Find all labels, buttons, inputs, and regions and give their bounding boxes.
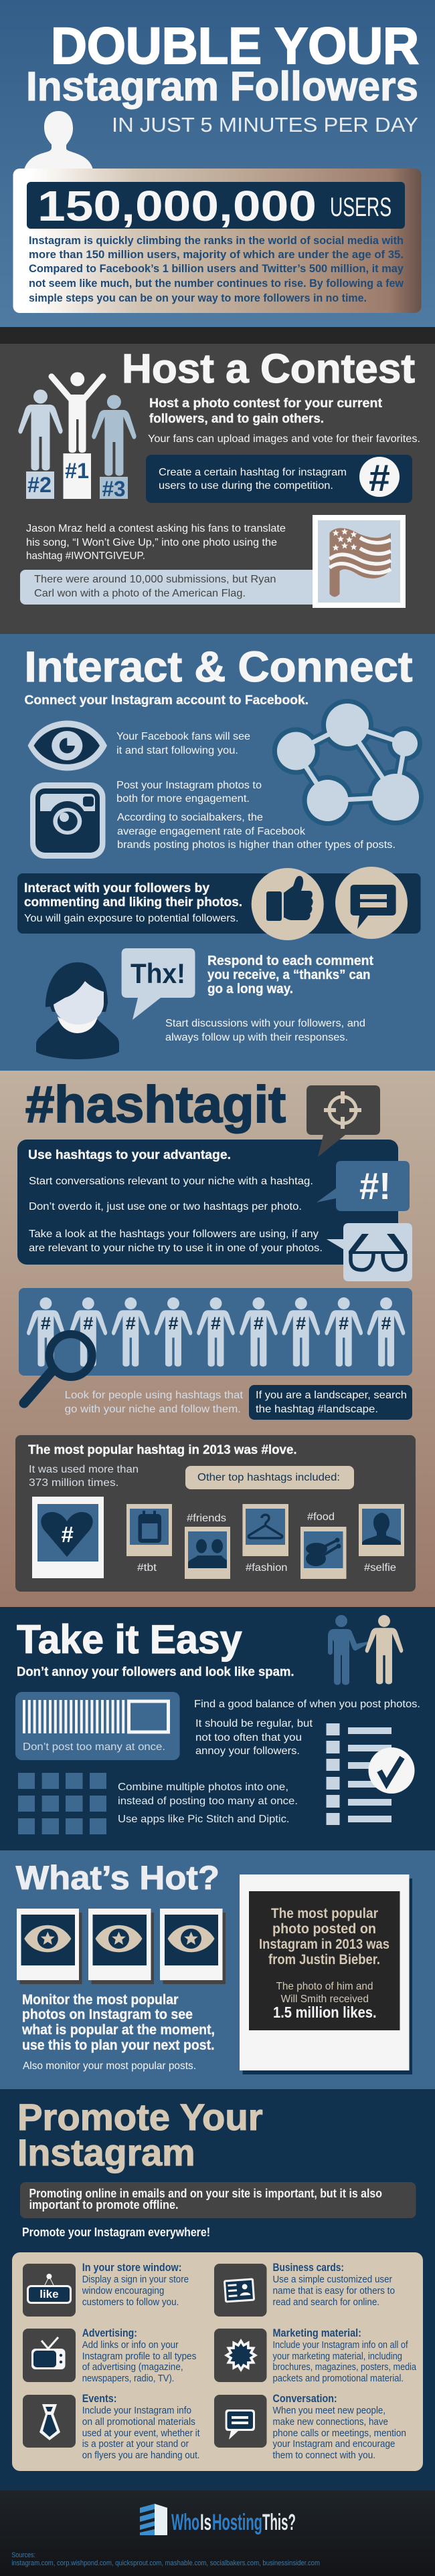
text: contest intro (148, 397, 420, 445)
polaroid: justin bieber: photo posted on (272, 1921, 376, 1937)
polaroid: eye two (88, 1909, 154, 1984)
panel: don't post too many (15, 1692, 180, 1760)
callout: other top hashtags: Other top hashtags included: (197, 1472, 340, 1483)
text: conversation: them to connect with you. (273, 2450, 375, 2461)
text: combine photos: Combine multiple photos into one, (118, 1782, 288, 1793)
subheading: connect account: Connect your Instagram account to Facebook. (24, 693, 309, 708)
icon: burst badge (214, 2329, 266, 2382)
speech bubble: glasses (327, 1223, 412, 1281)
subheading: don't annoy: Don’t annoy your followers and look like spam. (17, 1665, 294, 1679)
panel: don't post too many: Don’t post too many at once. (23, 1741, 165, 1753)
logo: whoishostingthis (140, 2504, 296, 2535)
icon: magnifying glass (24, 1334, 92, 1403)
title: DOUBLE YOUR (51, 17, 419, 75)
hashtag labels: #fashion (246, 1562, 288, 1574)
text: marketing material: your marketing material, including (273, 2351, 402, 2362)
heading: promote your instagram: Instagram (17, 2131, 195, 2173)
speech bubble: thx: Thx! (130, 958, 185, 989)
hashtag labels: #friends (187, 1513, 226, 1524)
speech bubble: hash exclamation (317, 1161, 410, 1211)
text: conversation (273, 2392, 406, 2461)
text: monitor your posts: Also monitor your most popular posts. (23, 2060, 196, 2072)
heading: take it easy: Take it Easy (17, 1617, 242, 1662)
text: sources: Sources: (11, 2551, 35, 2559)
panel: interact with followers (17, 867, 420, 940)
intro text: simple steps you can be on your way to more followers in no time. (29, 292, 367, 304)
text: events: is a poster at your stand or (82, 2439, 189, 2450)
text: contest intro: Host a photo contest for your current (149, 397, 383, 411)
text: respond to comments: go a long way. (207, 982, 293, 996)
stat banner: USERS (330, 193, 392, 222)
title (26, 17, 419, 136)
panel: hashtag people: # (296, 1313, 306, 1333)
text: events (82, 2392, 199, 2461)
panel: use hashtags: Take a look at the hashtags your followers are using, if any (29, 1228, 319, 1240)
panel: hashtag people: # (211, 1313, 221, 1333)
text: business cards: Use a simple customized user (273, 2274, 392, 2285)
text: post photos: both for more engagement. (116, 793, 250, 804)
title: Instagram Followers (26, 64, 418, 109)
heading: promote your instagram (17, 2096, 263, 2173)
panel: hashtag people: # (83, 1313, 93, 1333)
heading: what's hot: What’s Hot? (16, 1859, 220, 1897)
text: advertising: Advertising: (82, 2327, 137, 2339)
panel: hashtag people: # (254, 1313, 264, 1333)
panel: promotion tips (12, 2252, 423, 2471)
text: jason mraz: his song, “I Won’t Give Up,” into one photo using the (26, 537, 277, 548)
panel: use hashtags: Start conversations relevant to your niche with a hashtag. (29, 1176, 313, 1187)
text: events: on all promotional materials (82, 2417, 195, 2428)
polaroid: justin bieber: The most popular (271, 1906, 378, 1921)
text: business cards: Business cards: (273, 2261, 344, 2274)
text: post photos: Post your Instagram photos to (116, 780, 262, 791)
text: advertising: Instagram profile to all types (82, 2351, 197, 2362)
stat banner: 150,000,000 (37, 182, 317, 230)
intro text: Instagram is quickly climbing the ranks in the world of social media with (29, 234, 404, 247)
text: look for people: go with your niche and follow them. (65, 1404, 241, 1415)
text: store window (82, 2261, 189, 2308)
polaroid: love heart (32, 1497, 104, 1578)
text: balance (194, 1699, 420, 1757)
text: events: on flyers you are handing out. (82, 2450, 199, 2461)
text: marketing material (273, 2327, 417, 2384)
text: jason mraz: hashtag #IWONTGIVEUP. (26, 550, 145, 562)
icon: user silhouette (24, 111, 93, 170)
text: respond to comments: Respond to each comment (207, 954, 373, 968)
callout: submissions (20, 570, 318, 605)
text: combine photos (118, 1782, 298, 1825)
text: respond to comments: you receive, a “thanks” can (207, 968, 371, 982)
icon: conversation bubble (214, 2395, 266, 2448)
text: look for people: Look for people using hashtags that (65, 1390, 244, 1401)
polaroid: justin bieber: Instagram in 2013 was (259, 1937, 389, 1952)
section background: footer (0, 2490, 435, 2576)
text: facebook fans: it and start following you. (116, 745, 238, 756)
callout: landscaper: the hashtag #landscape. (256, 1404, 378, 1415)
intro text (29, 234, 404, 304)
callout: promote offline (20, 2182, 416, 2218)
text: business cards (273, 2261, 395, 2308)
icon: thumbs up (252, 868, 324, 940)
polaroid: love heart: # (62, 1522, 74, 1547)
section background: promote (0, 2089, 435, 2490)
text: monitor popular photos: what is popular at the moment, (21, 2022, 215, 2038)
hashtag labels: #selfie (364, 1562, 396, 1574)
polaroid: friends (185, 1527, 230, 1579)
text: start discussions: always follow up with their responses. (165, 1032, 348, 1043)
panel: most popular hashtag (15, 1435, 416, 1592)
text: events: used at your event, whether it (82, 2428, 199, 2439)
panel: use hashtags (17, 1140, 398, 1265)
title: IN JUST 5 MINUTES PER DAY (112, 113, 418, 136)
icon: comment bubble (335, 867, 408, 939)
intro text: Compared to Facebook’s 1 billion users and Twitter’s 500 million, it may (29, 262, 404, 275)
text: monitor popular photos: use this to plan your next post. (22, 2038, 214, 2053)
section background: what's hot (0, 1850, 435, 2089)
polaroid: justin bieber: from Justin Bieber. (268, 1952, 380, 1967)
text: conversation: phone calls or meetings, mention (273, 2428, 406, 2439)
polaroid: tbt calendar (126, 1504, 172, 1556)
speech bubble: target icon (307, 1085, 380, 1157)
icon: hash circle (359, 457, 400, 500)
text: jason mraz (26, 523, 286, 562)
icon: tv (23, 2329, 76, 2382)
heading: love: The most popular hashtag in 2013 was #love. (28, 1443, 297, 1457)
text: store window: In your store window: (82, 2261, 182, 2274)
text: used times: It was used more than (29, 1464, 139, 1475)
panel: hashtag people: # (41, 1313, 51, 1333)
section background: header (0, 0, 435, 327)
text: events: Events: (82, 2392, 116, 2405)
text: sources (11, 2551, 320, 2567)
callout: submissions: Carl won with a photo of the American Flag. (34, 588, 246, 599)
hashtag labels: #tbt (137, 1562, 157, 1574)
text: promote everywhere: Promote your Instagram everywhere! (22, 2226, 210, 2239)
section background: host a contest (0, 344, 435, 634)
panel: use hashtags: Don’t overdo it, just use one or two hashtags per photo. (29, 1201, 302, 1212)
callout: landscaper: If you are a landscaper, search (256, 1390, 407, 1401)
panel: interact with followers: You will gain exposure to potential followers. (24, 913, 238, 924)
panel: interact with followers: Interact with your followers by (24, 881, 209, 895)
polaroid: eye one (17, 1909, 82, 1984)
icon: instagram camera (30, 782, 106, 859)
panel: interact with followers: commenting and liking their photos. (24, 895, 242, 909)
callout: create a hashtag: users to use during the competition. (159, 480, 333, 492)
text: start discussions (165, 1018, 365, 1043)
text: store window: window encouraging (82, 2286, 164, 2296)
icon: like sign: like (39, 2288, 59, 2300)
text: jason mraz: Jason Mraz held a contest asking his fans to translate (26, 523, 286, 534)
heading: interact and connect: Interact & Connect (24, 643, 412, 691)
polaroid: justin bieber: Will Smith received (281, 1994, 369, 2005)
text: respond to comments (207, 954, 373, 996)
hashtag labels: #food (307, 1511, 335, 1523)
panel: hashtag people: # (381, 1313, 392, 1333)
text: advertising: Add links or info on your (82, 2340, 179, 2351)
logo: whoishostingthis: Hosting (212, 2510, 262, 2535)
heading: host a contest: Host a Contest (122, 346, 415, 391)
text: balance: It should be regular, but (195, 1718, 313, 1729)
callout: landscaper (249, 1385, 412, 1420)
panel: hashtag people (19, 1288, 412, 1376)
polaroid: eye three (160, 1909, 226, 1984)
panel: hashtag people: # (126, 1313, 136, 1333)
text: balance: Find a good balance of when you post photos. (194, 1699, 420, 1710)
hashtag labels (137, 1511, 396, 1574)
text: conversation: make new connections, have (273, 2417, 388, 2428)
panel: intro (13, 169, 422, 313)
polaroid: justin bieber: 1.5 million likes. (273, 2004, 377, 2021)
logo: whoishostingthis: This? (262, 2510, 296, 2535)
icon: contest podium (18, 372, 137, 501)
polaroid: justin bieber (240, 1874, 412, 2074)
text: conversation: Conversation: (273, 2392, 337, 2405)
callout: promote offline: important to promote offline. (29, 2198, 179, 2212)
panel: hashtag people: # (339, 1313, 349, 1333)
text: store window: Display a sign in your store (82, 2274, 189, 2285)
icon: contest podium: #1 (65, 459, 89, 483)
icon: photo grid (18, 1773, 106, 1834)
text: marketing material: Marketing material: (273, 2327, 361, 2339)
callout: create a hashtag: Create a certain hashtag for instagram (159, 467, 347, 478)
speech bubble: thx (122, 948, 195, 1020)
icon: contest podium: #2 (27, 473, 52, 497)
polaroid: selfie (359, 1504, 404, 1556)
polaroid: fashion hanger (242, 1504, 288, 1556)
text: post photos: brands posting photos is higher than other types of posts. (117, 839, 396, 851)
text: post photos: According to socialbakers, the (117, 812, 263, 823)
logo: whoishostingthis: Who (171, 2510, 199, 2535)
text: advertising: newspapers, radio, TV). (82, 2373, 174, 2384)
text: contest intro: Your fans can upload images and vote for their favorites. (148, 433, 420, 445)
text: look for people (65, 1390, 244, 1415)
icon: network graph (272, 699, 424, 826)
text: marketing material: Include your Instagram info on all of (273, 2340, 408, 2351)
icon: eye (28, 721, 107, 770)
text: post photos (116, 780, 396, 851)
text: marketing material: brochures, magazines, posters, media (273, 2362, 417, 2373)
text: monitor popular photos: Monitor the most popular (22, 1992, 179, 2008)
icon: two people pointing (328, 1615, 403, 1685)
icon: like sign (23, 2264, 76, 2317)
text: post photos: average engagement rate of Facebook (117, 826, 306, 837)
icon: contest podium: #3 (102, 477, 126, 501)
section background: dark band (0, 327, 435, 344)
text: conversation: When you meet new people, (273, 2405, 385, 2416)
text: used times: 373 million times. (29, 1477, 119, 1489)
text: business cards: name that is easy for others to (273, 2286, 395, 2296)
speech bubble: hash exclamation: #! (359, 1165, 391, 1208)
stat banner (27, 182, 405, 230)
logo: whoishostingthis: Is (200, 2510, 211, 2535)
section background: interact and connect (0, 634, 435, 1071)
text: conversation: your Instagram and encourage (273, 2439, 395, 2450)
text: advertising (82, 2327, 197, 2384)
text: combine photos: Use apps like Pic Stitch and Diptic. (118, 1814, 289, 1825)
text: balance: not too often that you (195, 1732, 302, 1743)
panel: use hashtags: are relevant to your niche try to use it in one of your photos. (29, 1243, 323, 1254)
text: advertising: of advertising (magazine, (82, 2362, 183, 2373)
text: facebook fans (116, 731, 250, 756)
text: contest intro: followers, and to gain others. (149, 412, 324, 426)
heading: promote your instagram: Promote Your (17, 2096, 263, 2138)
panel: use hashtags: Use hashtags to your advantage. (28, 1148, 231, 1162)
icon: business card (214, 2264, 266, 2317)
text: combine photos: instead of posting too many at once. (118, 1796, 298, 1807)
text: monitor popular photos (21, 1992, 215, 2053)
text: business cards: read and search for online. (273, 2297, 379, 2308)
callout: submissions: There were around 10,000 submissions, but Ryan (34, 574, 276, 585)
text: marketing material: packets and promotional material. (273, 2373, 404, 2384)
intro text: not seem like much, but the number continues to rise. By following a few (29, 277, 404, 290)
text: start discussions: Start discussions with your followers, and (165, 1018, 365, 1029)
panel: hashtag people: # (168, 1313, 179, 1333)
section background: take it easy (0, 1607, 435, 1850)
icon: woman avatar (36, 962, 119, 1059)
polaroid: food (300, 1527, 347, 1579)
text: balance: annoy your followers. (195, 1745, 300, 1757)
text: used times (29, 1464, 139, 1489)
polaroid: justin bieber: The photo of him and (276, 1981, 373, 1992)
text: sources: instagram.com, corp.wishpond.com, quicksprout.com, mashable.com, socialbakers.com, businessinsider.com (11, 2559, 320, 2567)
section background: hashtagit (0, 1071, 435, 1607)
text: facebook fans: Your Facebook fans will see (116, 731, 250, 742)
icon: checklist (327, 1723, 415, 1825)
callout: create a hashtag (146, 455, 412, 503)
icon: hash circle: # (369, 457, 390, 500)
text: store window: customers to follow you. (82, 2297, 179, 2308)
callout: other top hashtags (185, 1466, 354, 1489)
icon: tie (23, 2395, 76, 2448)
callout: promote offline: Promoting online in emails and on your site is important, but it is also (29, 2187, 382, 2200)
intro text: more than 150 million users, majority of which are under the age of 35. (29, 248, 404, 261)
icon: american flag polaroid (313, 515, 406, 608)
heading: hashtagit: #hashtagit (25, 1076, 286, 1134)
text: monitor popular photos: photos on Instagram to see (22, 2007, 193, 2022)
text: events: Include your Instagram info (82, 2405, 191, 2416)
